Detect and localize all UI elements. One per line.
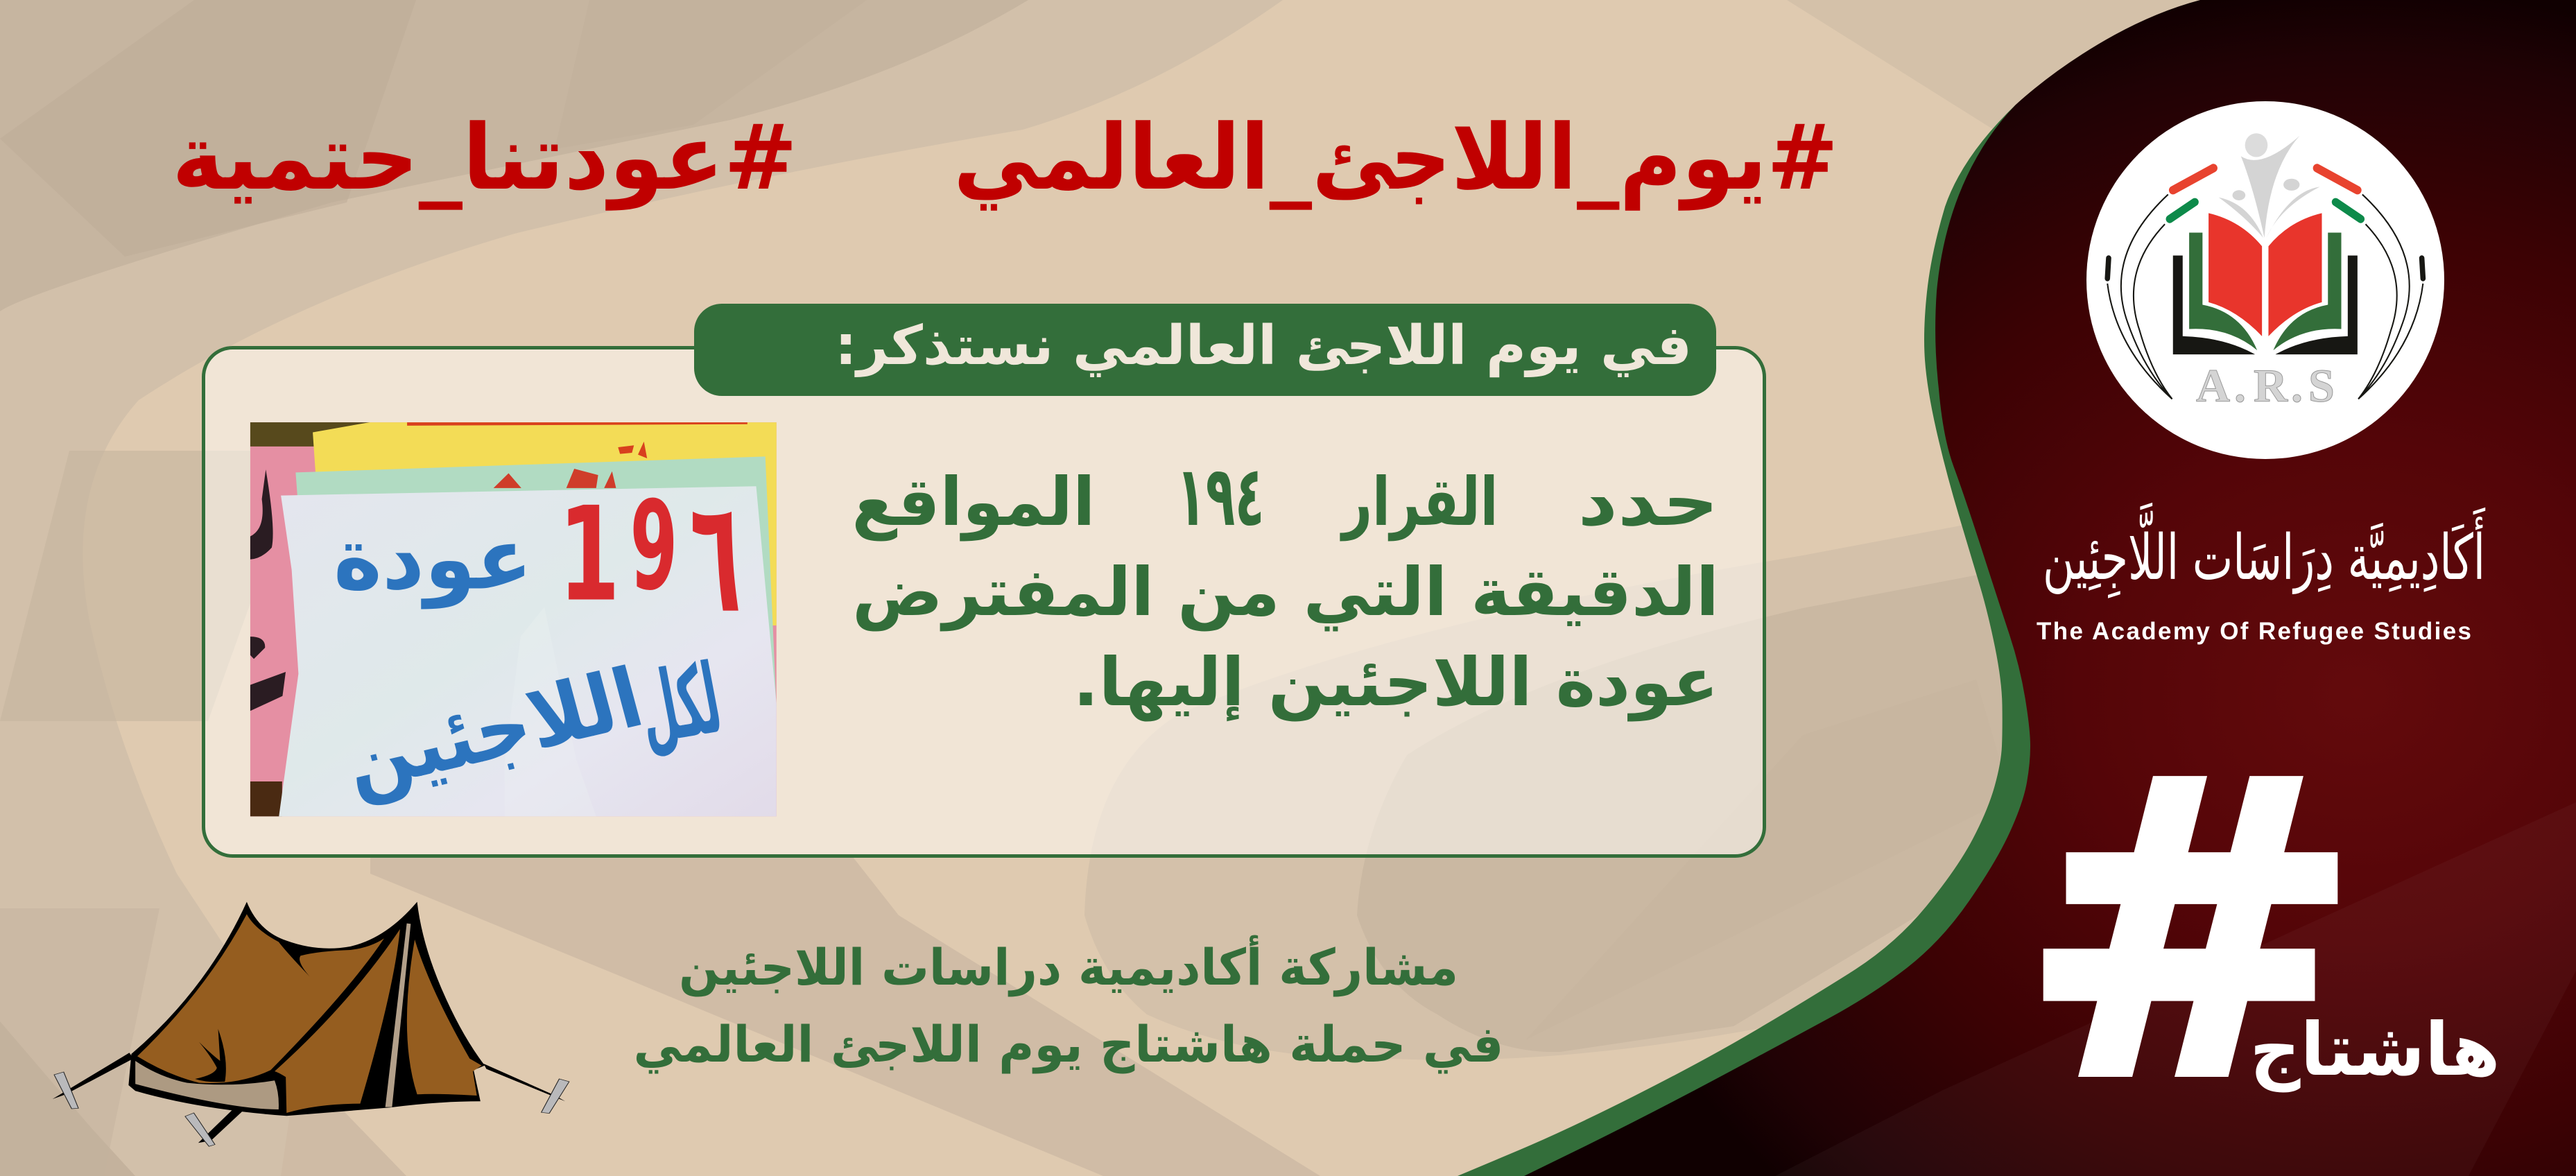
body text: عودة اللاجئين إليها. <box>1073 643 1718 722</box>
big hash symbol: # <box>2021 695 2360 1168</box>
photo sign words: عودة <box>334 510 533 609</box>
photo: protest sign 194 <box>250 422 777 816</box>
bottom caption: في حملة هاشتاج يوم اللاجئ العالمي <box>634 1015 1503 1074</box>
hashtag word: هاشتاج <box>2249 1008 2500 1093</box>
icon: tent <box>53 902 569 1146</box>
logo emblem: book and reeds <box>2107 133 2423 399</box>
academy name english: The Academy Of Refugee Studies <box>2037 618 2471 645</box>
body text: ١٩٤ <box>1176 449 1265 545</box>
body text <box>852 449 1719 722</box>
heading: hashtag our return is inevitable: #عودتنا_حتمية <box>172 105 797 211</box>
photo: protest sign 194: لكل <box>630 643 729 766</box>
panel: main text box <box>204 348 1764 856</box>
body text: القرار <box>1340 463 1498 541</box>
bottom caption: مشاركة أكاديمية دراسات اللاجئين <box>679 935 1458 997</box>
heading pill <box>694 304 1716 396</box>
logo initials: A.R.S <box>2196 359 2335 412</box>
photo sign numerals: 1 <box>558 479 620 630</box>
body text: حدد <box>1578 463 1718 541</box>
heading: hashtag world refugee day: #يوم_اللاجئ_العالمي <box>953 105 1838 211</box>
bottom caption <box>634 935 1503 1074</box>
photo sign numerals: ٦ <box>690 466 741 648</box>
body text: الدقيقة التي من المفترض <box>852 553 1719 632</box>
heading pill: في يوم اللاجئ العالمي نستذكر: <box>835 315 1692 377</box>
dark red panel <box>1524 0 2576 1176</box>
body text: المواقع <box>852 463 1096 542</box>
photo sign words: اللاجئين <box>334 650 652 811</box>
photo sign words <box>334 510 729 811</box>
photo sign numerals: 9 <box>630 475 677 618</box>
logo circle <box>2086 101 2444 459</box>
green curved band <box>1458 105 2080 1176</box>
photo sign numerals <box>558 466 741 648</box>
